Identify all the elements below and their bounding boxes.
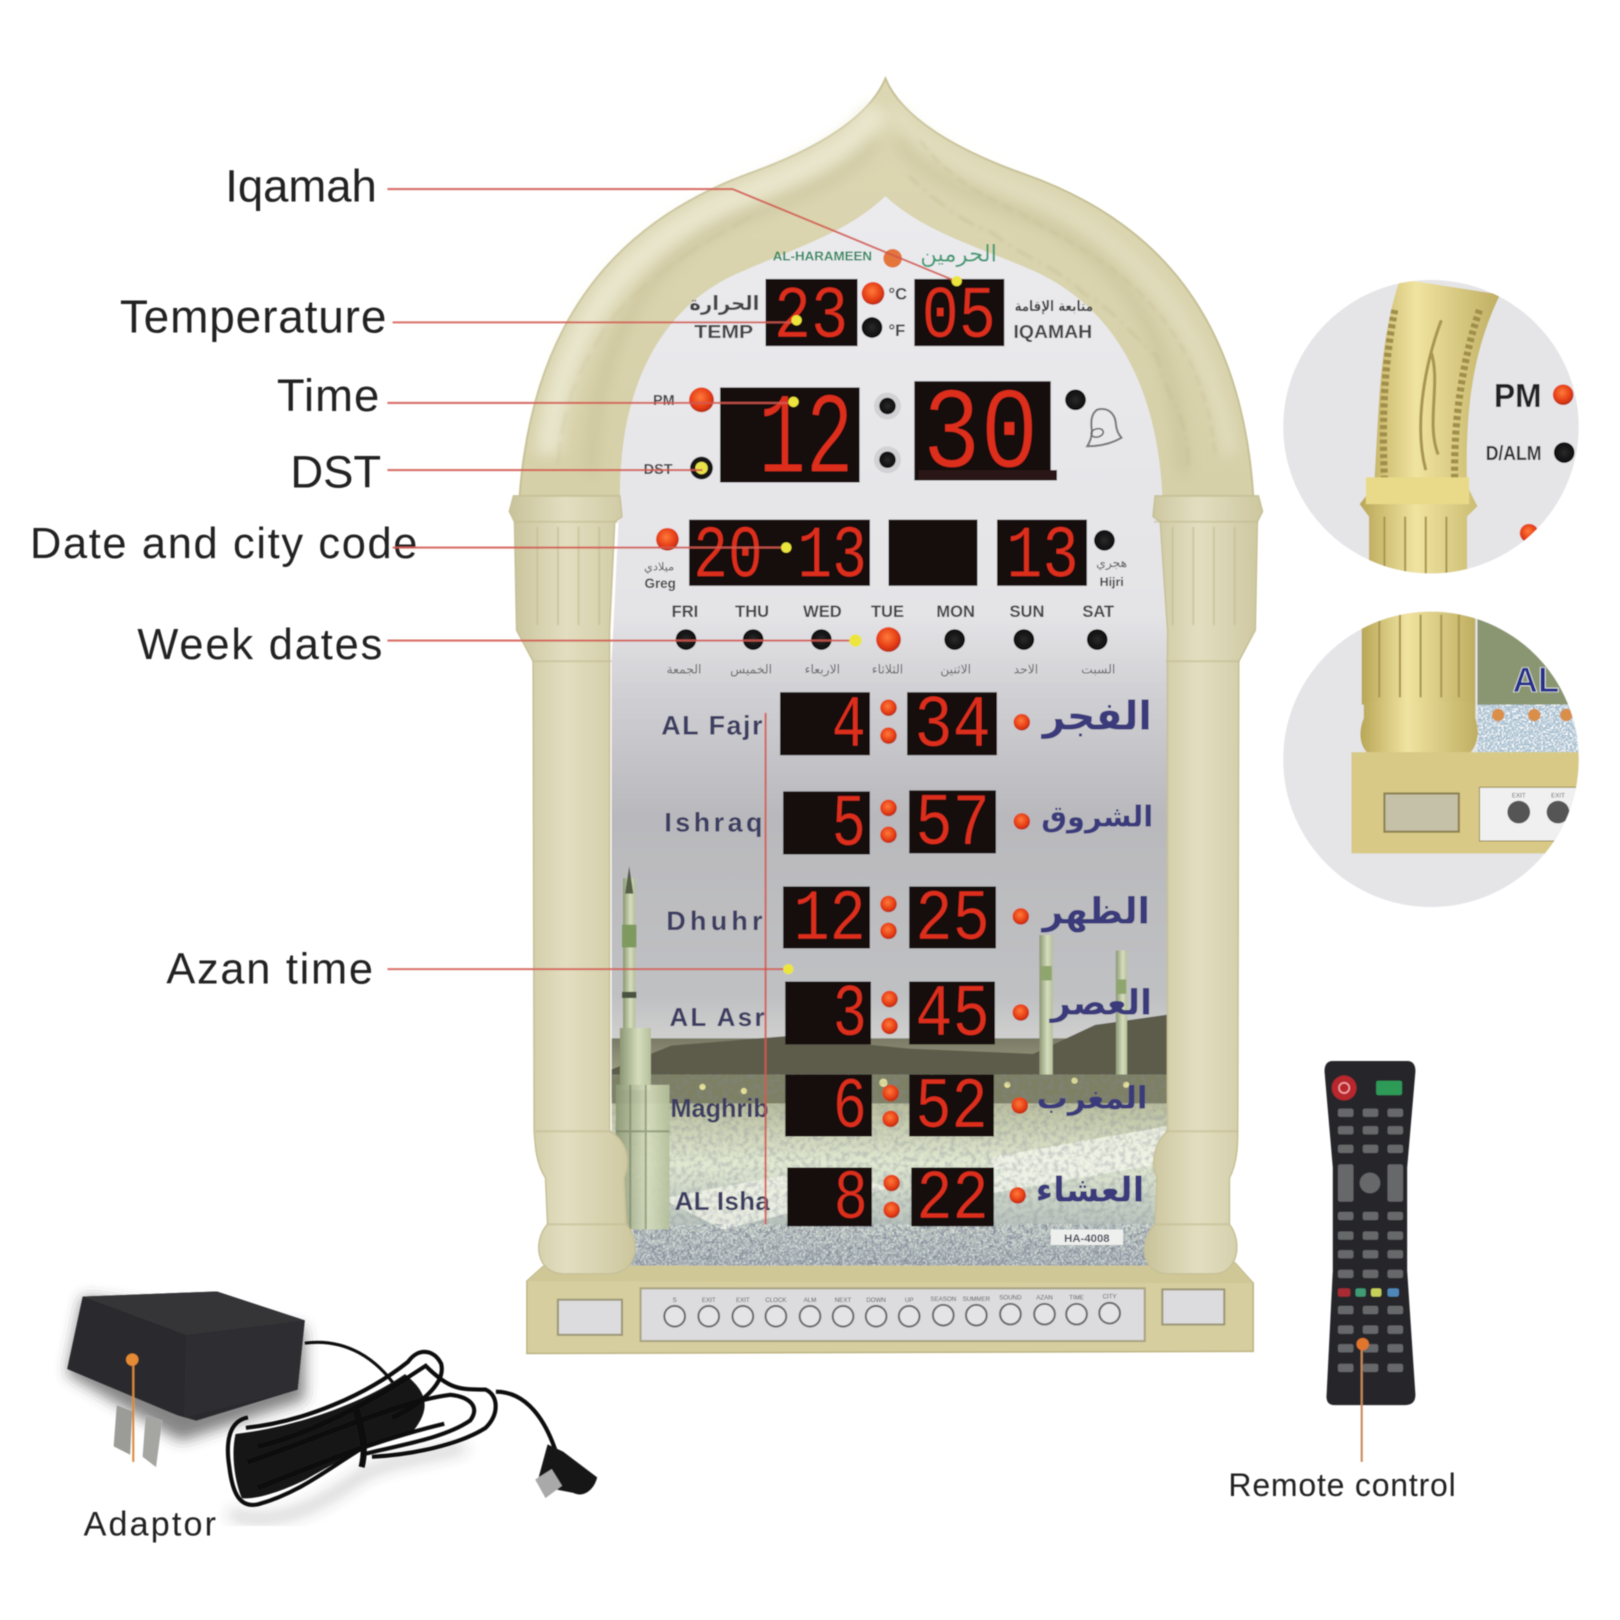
prayer: Maghrib bbox=[671, 1067, 1148, 1149]
prayer: Isha bbox=[675, 1161, 1144, 1240]
right column bbox=[1145, 496, 1263, 1274]
prayer: Asr: 45 bbox=[915, 974, 990, 1058]
weekday row: SUN bbox=[1010, 602, 1044, 621]
annotation: Week dates bbox=[137, 621, 862, 669]
prayer: Maghrib: 6 bbox=[833, 1067, 867, 1149]
annotation: DST: DST bbox=[290, 447, 381, 498]
weekday row: الاحد bbox=[1014, 662, 1038, 677]
prayer: Ishraq bbox=[664, 783, 1153, 868]
PM and DST indicators: DST bbox=[644, 462, 673, 478]
weekday row: MON bbox=[936, 602, 975, 621]
weekday row: السبت bbox=[1081, 662, 1115, 677]
DC plug bbox=[535, 1444, 597, 1498]
degree LEDs bbox=[862, 282, 907, 340]
prayer: Maghrib: Maghrib bbox=[671, 1095, 769, 1123]
prayer: Dhuhr: 12 bbox=[793, 879, 866, 961]
adaptor callout line bbox=[126, 1353, 138, 1462]
prayer: Asr bbox=[669, 974, 1152, 1058]
inset: bottom detail circle: EXIT bbox=[1551, 793, 1565, 800]
hijri display: Hijri bbox=[1100, 575, 1124, 589]
PM and DST indicators bbox=[644, 387, 714, 479]
prayer: Maghrib: المغرب bbox=[1037, 1081, 1148, 1117]
control button strip: SOUND bbox=[999, 1295, 1022, 1302]
hour display bbox=[720, 376, 860, 507]
weekday row: SAT bbox=[1082, 602, 1114, 621]
brand logo: الحرمين bbox=[920, 241, 997, 267]
gregorian date display: Greg bbox=[645, 576, 676, 591]
inset: bottom detail circle: AL bbox=[1513, 661, 1559, 700]
inset: top detail circle: PM bbox=[1494, 378, 1541, 415]
prayer: Isha: 8 bbox=[834, 1161, 868, 1240]
adaptor body bbox=[67, 1291, 305, 1421]
control button strip: DOWN bbox=[866, 1297, 886, 1304]
control button strip: EXIT bbox=[702, 1297, 716, 1304]
weekday row: THU bbox=[735, 602, 769, 621]
annotation: Date and city code bbox=[30, 520, 791, 568]
control button strip: TIME bbox=[1069, 1295, 1084, 1302]
model tag: HA-4008 bbox=[1064, 1233, 1110, 1245]
prayer: Isha: AL Isha bbox=[675, 1188, 770, 1216]
prayer: Dhuhr: Dhuhr bbox=[666, 906, 763, 936]
control button strip: EXIT bbox=[736, 1297, 750, 1304]
prayer: Dhuhr: 25 bbox=[915, 879, 990, 961]
brand logo: AL-HARAMEEN bbox=[773, 248, 872, 263]
temperature labels: الحرارة bbox=[689, 292, 759, 315]
prayer: Fajr: AL Fajr bbox=[661, 711, 763, 741]
weekday row: الاربعاء bbox=[805, 662, 840, 678]
label: Adaptor: Adaptor bbox=[84, 1505, 216, 1543]
inset: bottom detail circle bbox=[1283, 612, 1584, 907]
Makkah photo background bbox=[612, 866, 1170, 1266]
column flute details bbox=[513, 522, 1258, 1224]
prayer: Dhuhr bbox=[666, 879, 1150, 961]
control button strip: SUMMER bbox=[963, 1296, 991, 1303]
annotation: Azan time: Azan time bbox=[166, 946, 373, 994]
label: Remote control: Remote control bbox=[1228, 1467, 1456, 1503]
iqamah labels: متابعة الإقامة bbox=[1015, 299, 1093, 315]
prayer: Fajr: 4 bbox=[832, 685, 866, 769]
base of clock bbox=[527, 1263, 1253, 1353]
prayer: Fajr: 34 bbox=[914, 685, 991, 769]
colon LEDs bbox=[874, 393, 901, 473]
model tag bbox=[1051, 1229, 1123, 1245]
gregorian date display bbox=[644, 516, 870, 600]
weekday row: الثلاثاء bbox=[872, 662, 903, 677]
temperature labels bbox=[689, 292, 759, 342]
hijri display: هجري bbox=[1096, 555, 1127, 571]
blank display bbox=[889, 520, 977, 586]
remote callout line bbox=[1357, 1338, 1369, 1462]
temperature display: 23 bbox=[774, 276, 848, 360]
prayer: Ishraq: Ishraq bbox=[664, 808, 762, 838]
minute display: 30 bbox=[923, 371, 1038, 502]
clock frame arch bbox=[520, 79, 1253, 496]
annotation: Azan time bbox=[166, 713, 793, 1224]
prayer: Ishraq: الشروق bbox=[1041, 800, 1153, 834]
gregorian date display: ميلادي bbox=[644, 559, 674, 573]
prayer: Dhuhr: الظهر bbox=[1040, 890, 1150, 933]
annotation: Week dates: Week dates bbox=[137, 621, 382, 669]
prayer: Fajr bbox=[661, 685, 1152, 769]
control button strip: S bbox=[673, 1297, 677, 1304]
annotation: Date and city code: Date and city code bbox=[30, 520, 417, 568]
adaptor prongs bbox=[114, 1405, 162, 1467]
weekday row: الاثنين bbox=[940, 662, 971, 678]
iqamah labels: IQAMAH bbox=[1014, 321, 1092, 342]
annotation: Time bbox=[277, 370, 799, 421]
brand logo bbox=[773, 241, 997, 268]
iqamah display: 05 bbox=[922, 276, 996, 360]
PM and DST indicators: PM bbox=[653, 393, 675, 409]
annotation: Temperature: Temperature bbox=[120, 291, 386, 343]
control button strip: SEASON bbox=[930, 1296, 956, 1303]
weekday row: الجمعة bbox=[666, 662, 701, 677]
degree LEDs: °C bbox=[889, 285, 907, 304]
left speaker window bbox=[558, 1300, 622, 1335]
weekday row bbox=[666, 602, 1115, 678]
prayer: Ishraq: 5 bbox=[832, 784, 866, 868]
weekday row: الخميس bbox=[730, 662, 772, 678]
weekday row: TUE bbox=[871, 602, 904, 621]
prayer: Asr: AL Asr bbox=[669, 1004, 765, 1032]
prayer: Maghrib: 52 bbox=[915, 1067, 988, 1149]
annotation: Time: Time bbox=[277, 370, 380, 421]
remote control bbox=[1228, 1061, 1456, 1503]
wall clock product bbox=[509, 79, 1263, 1353]
inset: top detail circle bbox=[1283, 279, 1579, 579]
control button strip: CITY bbox=[1103, 1294, 1117, 1301]
remote button grid bbox=[1338, 1109, 1403, 1372]
annotation: Iqamah: Iqamah bbox=[225, 160, 377, 211]
alarm LED and bell icon bbox=[1065, 390, 1122, 448]
prayer: Isha: 22 bbox=[916, 1161, 989, 1240]
adaptor bbox=[67, 1291, 597, 1543]
control button strip bbox=[641, 1288, 1145, 1341]
control button strip: CLOCK bbox=[765, 1297, 787, 1304]
control button strip: UP bbox=[905, 1297, 913, 1304]
hour display: 12 bbox=[758, 376, 853, 507]
temperature labels: TEMP bbox=[694, 321, 753, 342]
remote body bbox=[1325, 1061, 1415, 1405]
inset: top detail circle: D/ALM bbox=[1486, 442, 1541, 465]
iqamah labels bbox=[1014, 299, 1093, 342]
inset: bottom detail circle: EXIT bbox=[1512, 793, 1526, 800]
control button strip: NEXT bbox=[835, 1297, 852, 1304]
gregorian date display: 20 13 bbox=[693, 516, 867, 600]
prayer: Fajr: الفجر bbox=[1041, 694, 1152, 739]
weekday row: WED bbox=[803, 602, 842, 621]
left column bbox=[509, 496, 635, 1274]
power and green buttons bbox=[1332, 1076, 1402, 1100]
hijri display bbox=[997, 516, 1127, 600]
annotation: Temperature bbox=[120, 291, 802, 343]
power cable bbox=[228, 1342, 556, 1519]
control button strip: AZAN bbox=[1036, 1295, 1053, 1302]
prayer: Isha: العشاء bbox=[1036, 1171, 1144, 1211]
degree LEDs: °F bbox=[889, 321, 905, 340]
prayer: Asr: 3 bbox=[833, 974, 867, 1058]
right speaker window bbox=[1162, 1289, 1224, 1325]
annotation: Iqamah bbox=[225, 160, 962, 286]
clock face panel bbox=[612, 196, 1167, 1266]
prayer: Ishraq: 57 bbox=[915, 783, 990, 867]
prayer: Asr: العصر bbox=[1049, 983, 1152, 1024]
hijri display: 13 bbox=[1006, 516, 1079, 600]
weekday row: FRI bbox=[672, 602, 698, 621]
adaptor shadow bbox=[67, 1297, 305, 1441]
control button strip: ALM bbox=[804, 1297, 816, 1304]
